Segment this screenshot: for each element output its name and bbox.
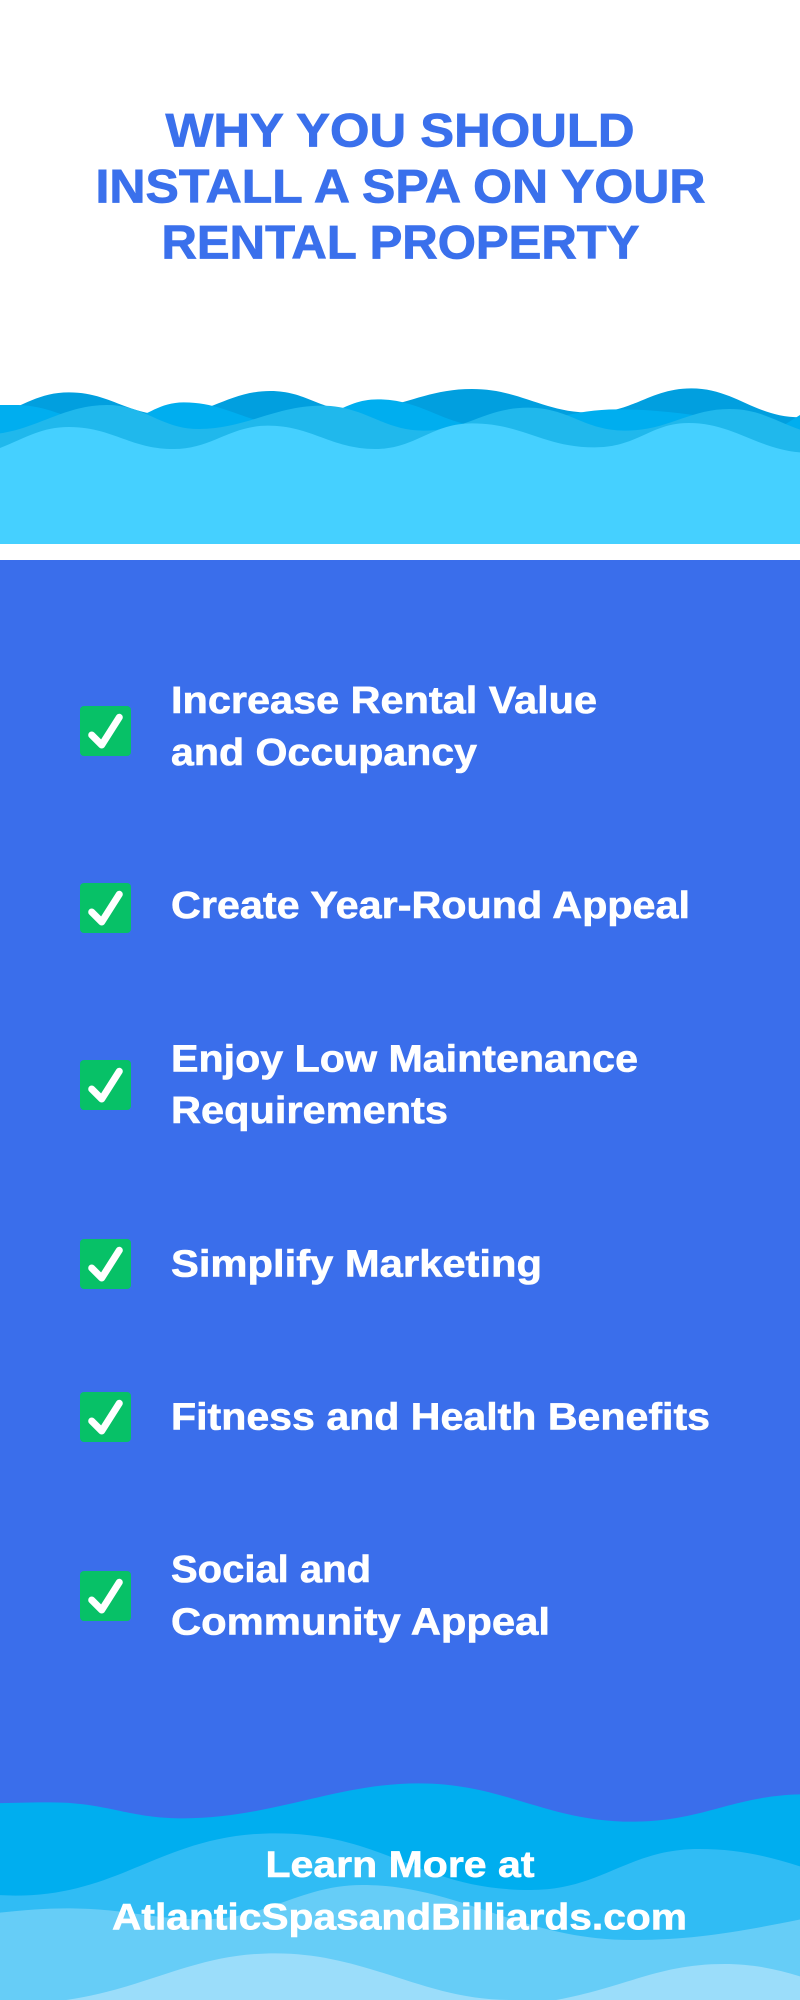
- item: increase rental value: [80, 680, 597, 774]
- item: low maintenance: [80, 1038, 638, 1132]
- title: WHY YOU SHOULD: [166, 104, 634, 157]
- title: RENTAL PROPERTY: [162, 216, 640, 269]
- icon: green check: [80, 883, 131, 933]
- call to action: AtlanticSpasandBilliards.com: [112, 1896, 687, 1938]
- item text: [171, 1549, 550, 1644]
- icon: green check: [80, 706, 131, 756]
- main blue panel: [0, 560, 800, 2000]
- item text: Simplify Marketing: [171, 1244, 542, 1286]
- item text: Community Appeal: [171, 1602, 550, 1644]
- title: INSTALL A SPA ON YOUR: [96, 160, 706, 213]
- item text: and Occupancy: [171, 732, 477, 774]
- top water waves: [0, 388, 800, 544]
- item: social and community: [80, 1549, 550, 1644]
- item text: [171, 1038, 638, 1132]
- icon: green check: [80, 1571, 131, 1621]
- item text: Increase Rental Value: [171, 680, 597, 722]
- item: simplify marketing: [80, 1239, 542, 1289]
- item text: [171, 680, 597, 774]
- title: [96, 104, 706, 269]
- checklist: [80, 680, 710, 1644]
- icon: green check: [80, 1239, 131, 1289]
- item text: Create Year-Round Appeal: [171, 885, 690, 927]
- item: year-round appeal: [80, 883, 690, 933]
- bottom water waves: [0, 1783, 800, 2000]
- call to action: [112, 1844, 687, 1938]
- icon: green check: [80, 1060, 131, 1110]
- icon: green check: [80, 1392, 131, 1442]
- item: fitness and health: [80, 1392, 710, 1442]
- item text: Social and: [171, 1549, 371, 1591]
- call to action: Learn More at: [266, 1844, 534, 1885]
- item text: Requirements: [171, 1090, 448, 1132]
- item text: Fitness and Health Benefits: [171, 1396, 710, 1438]
- item text: Enjoy Low Maintenance: [171, 1038, 638, 1080]
